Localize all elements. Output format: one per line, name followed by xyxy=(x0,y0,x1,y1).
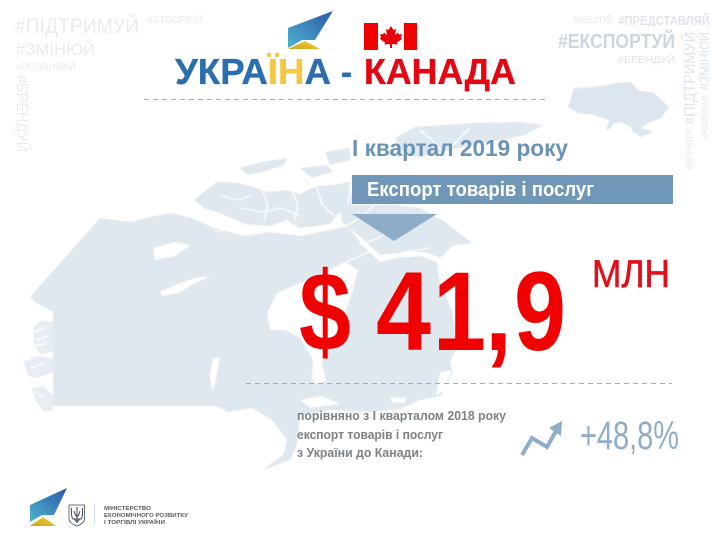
heading: quarter: І квартал 2019 року xyxy=(352,135,568,161)
icon: Canadian flag xyxy=(364,23,417,50)
hashtags: top right: #БРЕНДУЙ xyxy=(618,53,675,66)
hashtags: top right: #ІНВЕСТУЙ xyxy=(574,14,612,25)
unit: million: МЛН xyxy=(592,253,670,296)
map: Baffin Island xyxy=(340,205,472,258)
separator xyxy=(94,504,95,525)
logo: Ministry mark xyxy=(30,488,67,526)
map: Lake Winnipeg xyxy=(210,358,220,391)
hashtags: top left: #ЗМІНЮЙ xyxy=(16,40,95,59)
hashtags: top left: #СТВОРЮЙ xyxy=(147,13,203,26)
main value: , xyxy=(485,249,512,374)
hashtags: top right: #РОЗВИВАЙ xyxy=(701,96,710,140)
map: Great Lakes xyxy=(300,370,452,408)
title: КАНАДА xyxy=(364,51,516,92)
logo: Ministry mark top xyxy=(288,11,333,49)
title: УКРАЇНА xyxy=(175,51,331,92)
comparison text: з України до Канади: xyxy=(297,446,423,460)
map: Great Slave Lake xyxy=(160,276,210,296)
main value: 1 xyxy=(433,249,486,374)
divider: lower xyxy=(246,382,672,384)
icon: growth arrow xyxy=(522,421,562,455)
hashtags: top right: #ЕКСПОРТУЙ xyxy=(558,29,675,53)
hashtags: top right: #ПІДТРИМУЙ xyxy=(680,32,699,125)
map: west coast fragments xyxy=(24,320,53,412)
map: water and inland gaps xyxy=(153,242,452,408)
map: mainland xyxy=(30,213,458,470)
main value: 9 xyxy=(514,249,566,374)
icon: trident xyxy=(69,505,84,526)
divider: title xyxy=(144,98,545,100)
ministry name: МІНІСТЕРСТВО xyxy=(104,506,152,512)
hashtags: top right: #ВІРЕНДУЙ xyxy=(685,130,694,170)
ministry name: ЕКОНОМІЧНОГО РОЗВИТКУ xyxy=(104,513,189,519)
banner: export of goods and services: Експорт товарів і послуг xyxy=(367,179,594,201)
main value xyxy=(299,249,566,374)
icon: down triangle xyxy=(352,214,437,241)
banner: export of goods and services xyxy=(352,175,673,204)
map: Great Bear Lake xyxy=(153,242,191,260)
main value: 4 xyxy=(376,249,431,374)
comparison text: експорт товарів і послуг xyxy=(297,428,443,442)
ministry name: І ТОРГІВЛІ УКРАЇНИ xyxy=(104,519,165,526)
map: Ukraine silhouette xyxy=(568,82,669,137)
comparison text xyxy=(297,409,506,460)
growth value: +48,8% xyxy=(580,414,679,458)
hashtags: top left: #БРЕНДУЙ xyxy=(13,75,32,152)
hashtags: top right xyxy=(558,13,712,170)
hashtags: top right: #ПРЕДСТАВЛЯЙ xyxy=(618,13,710,28)
main value: $ xyxy=(299,249,351,374)
logo: Ministry footer xyxy=(30,488,189,526)
title: - xyxy=(341,51,352,92)
map: Hudson Bay xyxy=(267,262,358,385)
title xyxy=(175,51,516,92)
comparison text: порівняно з І кварталом 2018 року xyxy=(297,409,506,423)
map: arctic islands xyxy=(194,182,352,228)
hashtags: top left xyxy=(13,13,203,152)
hashtags: top right: #ЗМІНЮЙ xyxy=(695,32,712,90)
map: Canada background xyxy=(24,122,543,470)
hashtags: top left: #ПІДТРИМУЙ xyxy=(15,14,139,38)
map: Ellesmere xyxy=(395,122,543,158)
ministry name xyxy=(104,506,189,526)
hashtags: top left: #РОЗВИВАЙ xyxy=(16,60,76,73)
